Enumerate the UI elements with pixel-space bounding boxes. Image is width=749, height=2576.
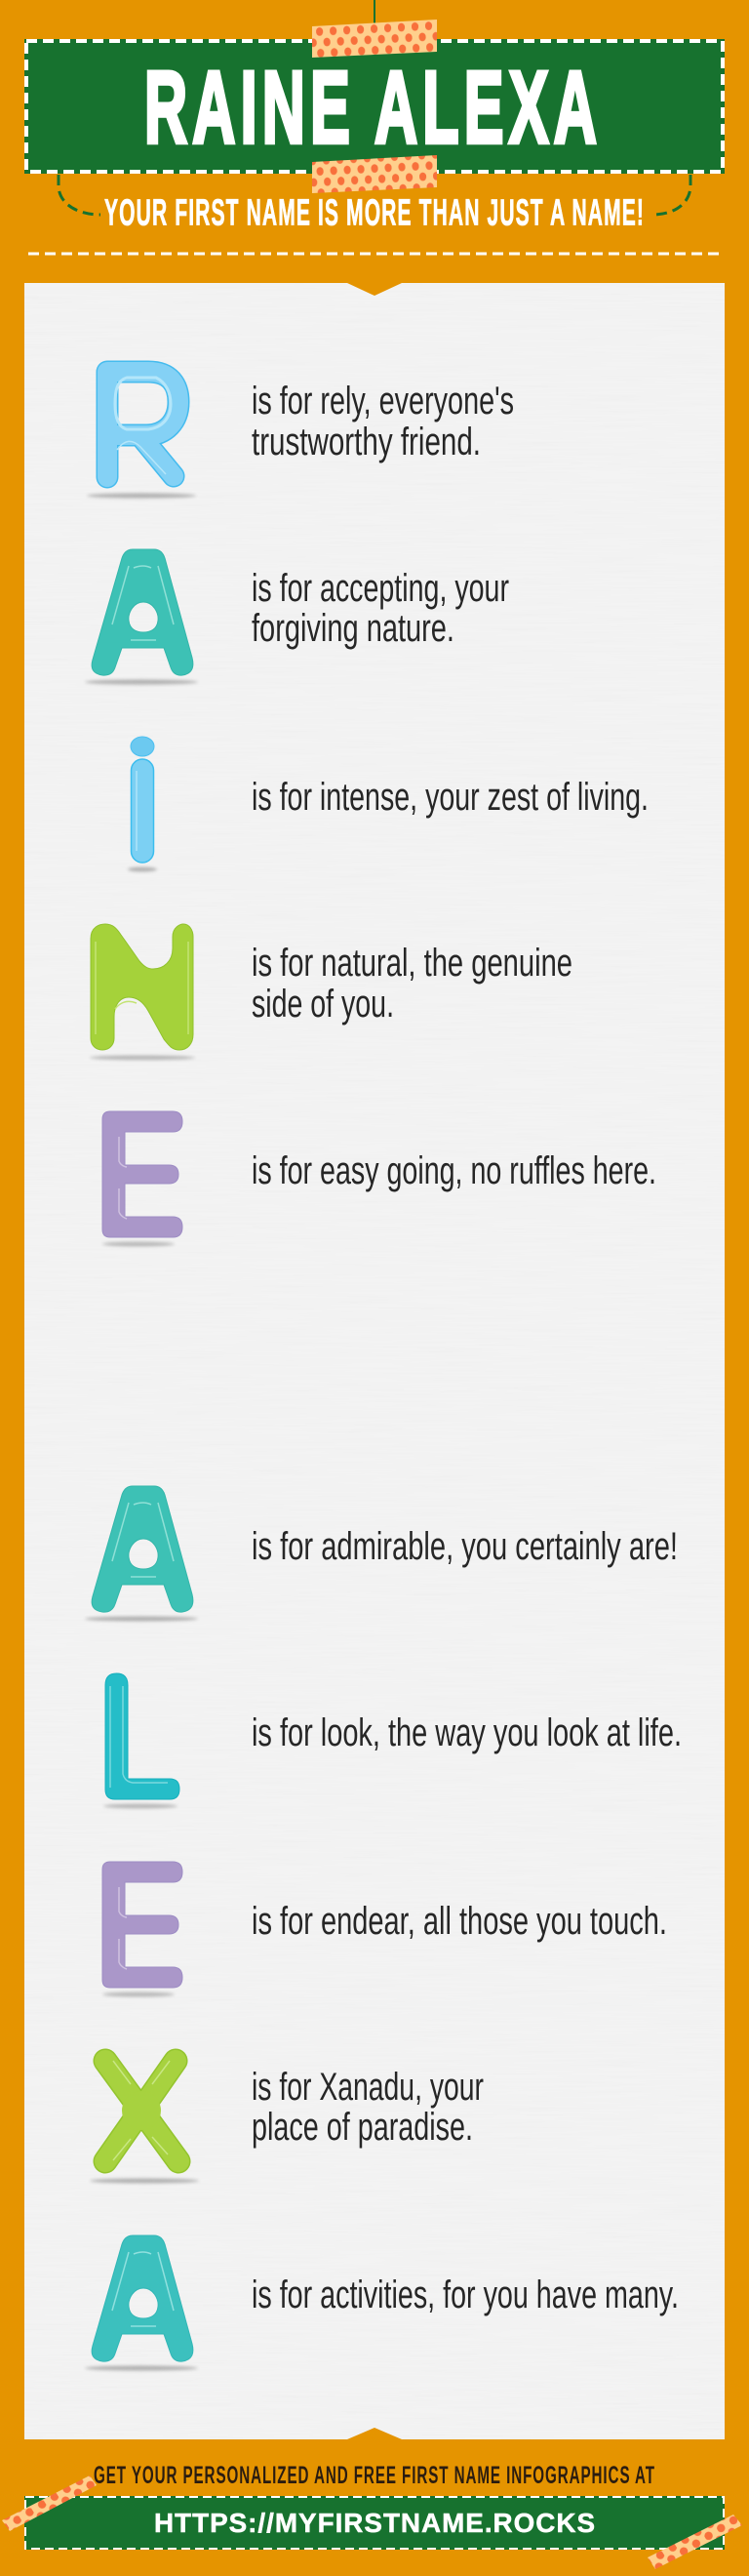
- letter E (Alexa): [102, 1862, 182, 1996]
- lower tape: [312, 155, 437, 193]
- letter L: [103, 1673, 179, 1808]
- panel: letters: [24, 283, 725, 2439]
- letter E (Raine): [102, 1111, 182, 1246]
- text: N: [252, 942, 572, 1026]
- text: R: [252, 380, 514, 463]
- letter I: [128, 737, 157, 871]
- text: A: [252, 567, 509, 650]
- left dashed bracket: [59, 175, 100, 215]
- hanging thread: [374, 0, 375, 25]
- text: R: trustworthy friend.: [252, 421, 481, 463]
- footer url: HTTPS://MYFIRSTNAME.ROCKS: [154, 2508, 596, 2538]
- letter A (final): [85, 2235, 198, 2371]
- letter N: [90, 924, 195, 1060]
- footer banner: [24, 2496, 725, 2550]
- header banner: [24, 39, 725, 174]
- right dashed bracket: [652, 175, 690, 215]
- footer tape left: [2, 2475, 97, 2531]
- letter A (Alexa): [85, 1486, 198, 1622]
- text: X: [252, 2066, 484, 2149]
- text: A: forgiving nature.: [252, 607, 454, 650]
- text: R: is for rely, everyone's: [252, 380, 514, 423]
- top tape: [312, 20, 437, 58]
- text: N: is for natural, the genuine: [252, 942, 572, 985]
- text: A: is for accepting, your: [252, 567, 509, 610]
- letter R: [87, 372, 196, 499]
- letter A (Raine): [85, 549, 198, 685]
- text: X: place of paradise.: [252, 2106, 473, 2149]
- text: X: is for Xanadu, your: [252, 2066, 484, 2109]
- white dashed divider: [28, 252, 721, 256]
- text: N: side of you.: [252, 983, 394, 1026]
- footer tape right: [648, 2515, 742, 2569]
- letter X: [90, 2061, 199, 2184]
